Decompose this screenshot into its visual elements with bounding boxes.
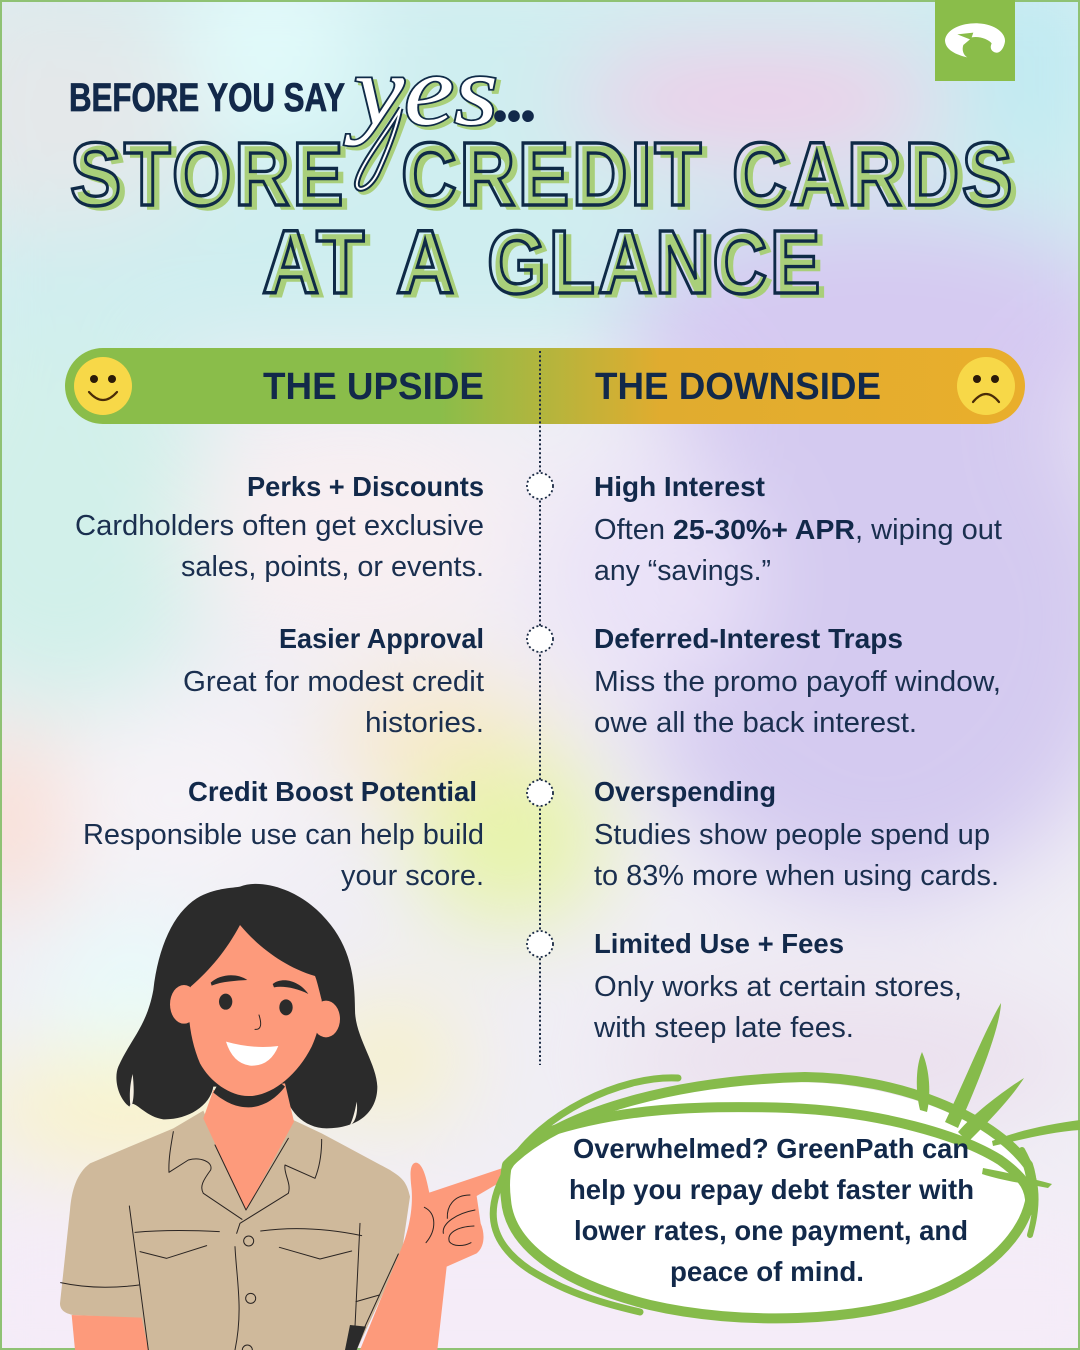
logo badge (935, 0, 1015, 81)
icon: frowning face (957, 357, 1015, 415)
header bar: upside and downside (65, 348, 1025, 424)
icon: smiley face (74, 357, 132, 415)
title line 1 and 2 outline: STORE (70, 125, 346, 225)
pointing arm and hand (360, 1163, 510, 1350)
upside: credit boost potential (83, 776, 484, 892)
nose (255, 1015, 261, 1029)
callout text: help you repay debt faster with (569, 1174, 974, 1205)
smile (226, 1042, 278, 1066)
title line 1 and 2 outline: CREDIT (401, 125, 704, 225)
upside: credit boost potential: Responsible use can help build (83, 819, 484, 851)
title line 1 and 2 shadow (76, 129, 1021, 317)
downside: high interest (594, 471, 1002, 587)
downside: high interest: Often (594, 514, 665, 546)
callout text: peace of mind. (670, 1256, 864, 1287)
script word: yes: yes (348, 38, 502, 149)
timeline node 3 (527, 780, 553, 806)
downside: overspending: to 83% more when using cards. (594, 860, 999, 892)
downside: high interest: any “savings.” (594, 555, 771, 587)
upside: perks and discounts (75, 471, 484, 583)
heading: the downside: THE DOWNSIDE (595, 366, 881, 408)
upside: perks and discounts: Perks + Discounts (247, 471, 484, 502)
neck (203, 1083, 294, 1211)
downside: overspending: Overspending (594, 776, 776, 807)
upside: easier approval: Great for modest credit (183, 666, 484, 698)
downside: deferred-interest traps: Deferred-Interest Traps (594, 623, 903, 654)
title line 1 and 2 outline: AT (262, 213, 367, 313)
shirt line details (61, 1132, 398, 1350)
title line 1 and 2 outline: A (396, 213, 457, 313)
timeline (527, 351, 553, 1065)
scribble spikes (917, 1003, 1080, 1188)
shirt (60, 1111, 410, 1350)
upside: credit boost potential: your score. (341, 860, 484, 892)
chin shadow (213, 1077, 285, 1107)
hair (116, 884, 377, 1128)
downside: limited use and fees: Limited Use + Fees (594, 928, 844, 959)
title line 1 and 2 shadow: CARDS (738, 129, 1021, 229)
downside: overspending: Studies show people spend up (594, 819, 990, 851)
downside: deferred-interest traps: Miss the promo payoff window, (594, 666, 1001, 698)
upside: easier approval: histories. (365, 707, 484, 739)
downside: deferred-interest traps: owe all the back interest. (594, 707, 917, 739)
upside: easier approval (183, 623, 484, 739)
scribble strokes (493, 1077, 1036, 1318)
illustration: woman pointing (60, 884, 510, 1350)
title (69, 35, 1021, 317)
timeline node 1 (527, 473, 553, 499)
upside: perks and discounts: Cardholders often get exclusive (75, 510, 484, 542)
downside: limited use and fees: Only works at certain stores, (594, 971, 962, 1003)
downside: limited use and fees: with steep late fees. (593, 1012, 854, 1044)
title line 1 and 2 outline: GLANCE (487, 213, 823, 313)
title line 1 and 2 shadow: STORE (76, 129, 352, 229)
title line 1 and 2 shadow: GLANCE (493, 217, 829, 317)
downside: deferred-interest traps (594, 623, 1001, 739)
downside: limited use and fees (593, 928, 962, 1044)
script word: yes: yes (344, 35, 498, 146)
timeline node 4 (527, 931, 553, 957)
left forearm (72, 1315, 148, 1350)
callout text (569, 1133, 974, 1287)
downside: high interest: 25-30%+ APR (673, 514, 855, 545)
bubble fill (505, 1082, 1028, 1315)
downside: high interest: High Interest (594, 471, 765, 502)
title line 1 and 2 shadow: CREDIT (407, 129, 710, 229)
eyebrows (211, 975, 247, 986)
ellipsis: ... (491, 57, 537, 137)
upside: easier approval: Easier Approval (279, 623, 484, 654)
upside: perks and discounts: sales, points, or events. (181, 551, 484, 583)
timeline node 2 (527, 626, 553, 652)
callout: greenpath scribble bubble (493, 1003, 1080, 1318)
script word: yes (344, 35, 502, 192)
belt strap (345, 1325, 366, 1350)
title line 1 and 2 shadow: AT (268, 217, 373, 317)
ears (170, 985, 198, 1024)
upside: credit boost potential: Credit Boost Potential (188, 776, 477, 807)
downside: high interest: , wiping out (855, 514, 1002, 546)
title line 1 and 2 outline (70, 125, 1015, 313)
hair slits (130, 1074, 357, 1125)
callout text: Overwhelmed? GreenPath can (573, 1133, 969, 1164)
callout text: lower rates, one payment, and (574, 1215, 968, 1246)
finger lines (424, 1195, 475, 1246)
eyes (219, 994, 232, 1010)
title line 1 and 2 shadow: A (402, 217, 463, 317)
heading: the upside: THE UPSIDE (263, 366, 484, 408)
downside: overspending (594, 776, 999, 892)
face (189, 925, 322, 1096)
eyebrow: before you say: BEFORE YOU SAY (69, 76, 345, 120)
title line 1 and 2 outline: CARDS (732, 125, 1015, 225)
